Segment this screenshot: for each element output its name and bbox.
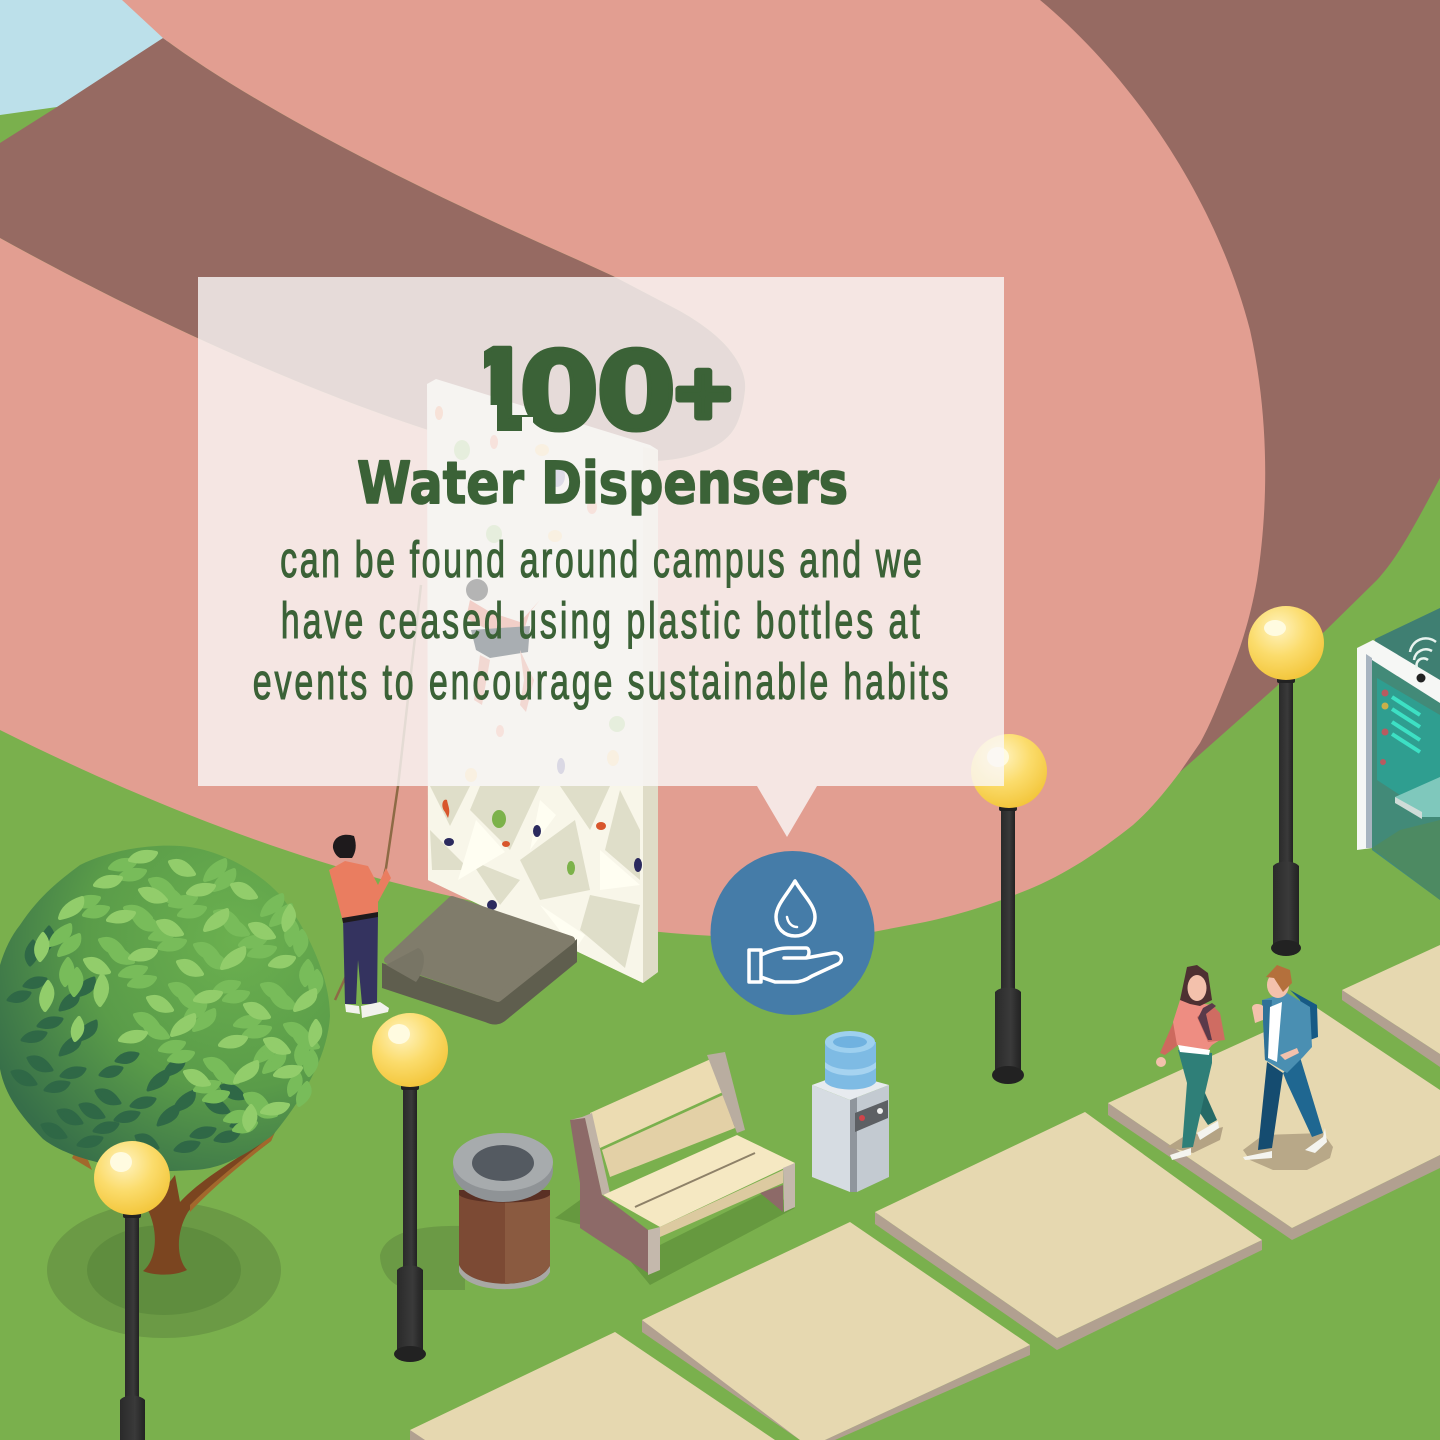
- kiosk: [1357, 608, 1440, 900]
- paved slab 5: [410, 1332, 775, 1440]
- tree: [0, 846, 330, 1275]
- climbing wall: [427, 379, 658, 983]
- climber seen through panel: [466, 579, 540, 712]
- text block: description: events to encourage sustainable habits: [253, 654, 948, 711]
- tree shadow: [47, 1202, 281, 1338]
- belayer figure: [329, 585, 421, 1018]
- heading: water dispensers: Water Dispensers: [357, 449, 848, 517]
- text block: description: have ceased using plastic bottles at: [281, 593, 920, 650]
- lamp post: right: [1248, 606, 1324, 956]
- text block: description: can be found around campus and we: [280, 532, 922, 589]
- heading: 100+: 0: [519, 330, 599, 455]
- water cooler: [812, 1031, 889, 1192]
- lamp shadow left: [380, 1226, 465, 1290]
- heading: 100+: +: [675, 343, 731, 443]
- background: sky: [0, 0, 170, 115]
- panel: callout: [198, 277, 1004, 837]
- heading: 100+: 1: [463, 322, 534, 454]
- text block: description: [253, 532, 948, 711]
- lamp post: near tree: [94, 1141, 170, 1440]
- lamp post: centre: [971, 734, 1047, 1084]
- trash bin: [453, 1133, 553, 1289]
- icon: hand holding water drop: [710, 851, 874, 1015]
- light leaves: [36, 852, 320, 1130]
- paved slab 3: [875, 1112, 1262, 1350]
- dark leaves: [8, 927, 255, 1163]
- background: pink plaza: [0, 0, 1265, 937]
- crash mat: [382, 900, 577, 1024]
- heading: 100+: [484, 346, 732, 432]
- medium leaves: [50, 860, 321, 1131]
- paved slab 1: [1342, 945, 1440, 1067]
- paved slab 2: [1108, 1008, 1440, 1240]
- background: brown path right: [1000, 0, 1440, 772]
- students walking: [1156, 965, 1333, 1170]
- bench: [555, 1052, 795, 1285]
- lamp post: near bin: [372, 1013, 448, 1362]
- paved slab 4: [642, 1222, 1030, 1440]
- heading: 100+: 0: [596, 330, 676, 455]
- background: brown path left: [0, 38, 745, 461]
